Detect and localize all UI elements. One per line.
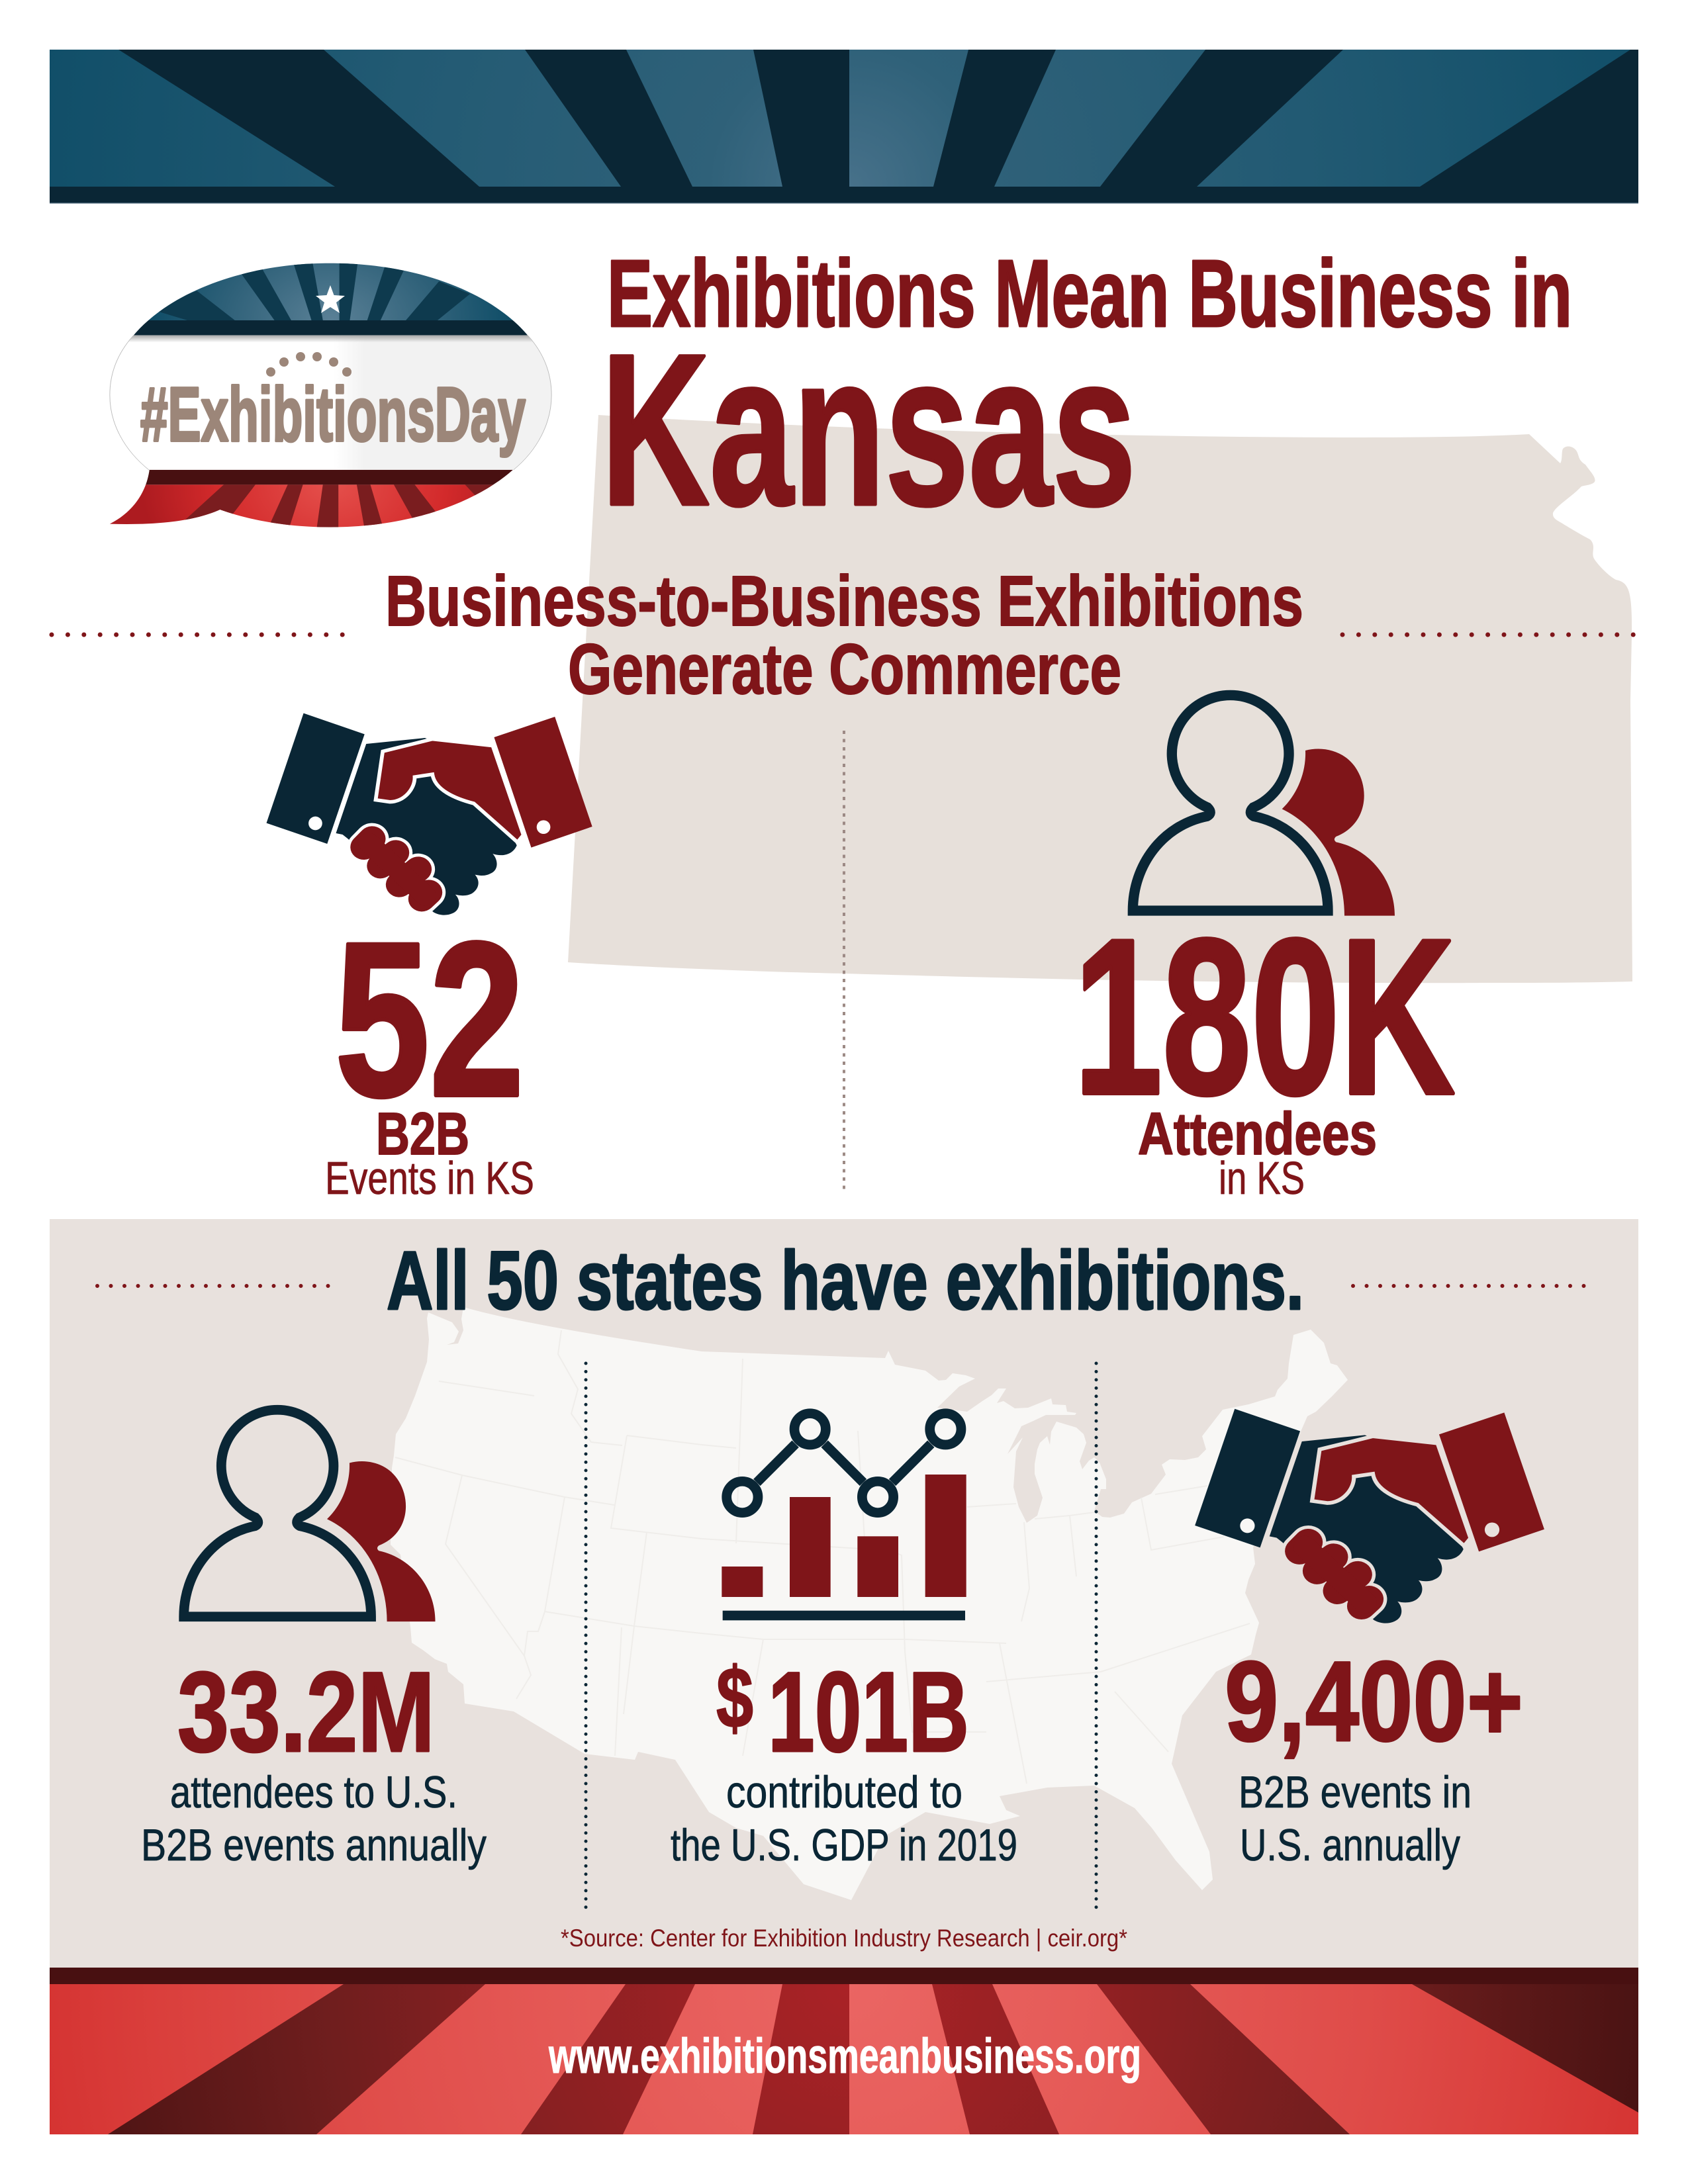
stat: 180K attendees: in KS xyxy=(1219,1152,1305,1204)
stat: $101B GDP: contributed to xyxy=(726,1767,962,1817)
stat: 52 B2B events: Events in KS xyxy=(325,1152,534,1204)
stat: 52 B2B events xyxy=(325,897,534,1204)
stat: 9,400+ events: U.S. annually xyxy=(1240,1820,1460,1870)
panel: all 50 states xyxy=(50,1219,1638,1968)
source note: *Source: Center for Exhibition Industry Research | ceir.org* xyxy=(561,1925,1127,1952)
title: Kansas: Kansas xyxy=(601,310,1136,551)
icon: handshake small xyxy=(1195,1409,1544,1623)
stat: 52 B2B events: 52 xyxy=(335,897,524,1142)
stat: 33.2M attendees xyxy=(141,1649,487,1870)
heading: business-to-business: Generate Commerce xyxy=(568,629,1121,709)
website url: www.exhibitionsmeanbusiness.org xyxy=(548,2028,1141,2083)
badge dots arc xyxy=(266,352,352,377)
stat: 180K attendees xyxy=(1074,893,1455,1204)
icon: people xyxy=(1133,695,1395,916)
US map xyxy=(391,1307,1348,1900)
stat: 52 B2B events: B2B xyxy=(376,1101,469,1167)
icon: chart xyxy=(722,1414,966,1620)
stat: 33.2M attendees: attendees to U.S. xyxy=(170,1767,457,1817)
stat: 9,400+ events: 9,400+ xyxy=(1225,1638,1523,1765)
badge star xyxy=(316,285,345,313)
stat: 180K attendees: Attendees xyxy=(1138,1101,1377,1167)
heading: business-to-business xyxy=(385,561,1303,709)
hashtag speech bubble badge xyxy=(109,263,552,527)
stat: $101B GDP: $ xyxy=(716,1649,753,1746)
stat: 9,400+ events xyxy=(1225,1638,1523,1870)
stat: 33.2M attendees: B2B events annually xyxy=(141,1820,487,1870)
kansas state silhouette xyxy=(568,415,1632,983)
heading: business-to-business: Business-to-Business Exhibitions xyxy=(385,561,1303,641)
icon: people small xyxy=(184,1410,436,1621)
badge hashtag text: #ExhibitionsDay xyxy=(140,371,526,457)
stat: 9,400+ events: B2B events in xyxy=(1239,1767,1472,1817)
stat: 33.2M attendees: 33.2M xyxy=(177,1649,435,1776)
bottom banner xyxy=(50,1968,1638,2134)
stat: 180K attendees: 180K xyxy=(1074,893,1455,1140)
stat: $101B GDP: 101B xyxy=(768,1649,969,1776)
stat: $101B GDP xyxy=(671,1649,1017,1870)
heading: all 50 states have exhibitions: All 50 states have exhibitions. xyxy=(387,1235,1304,1327)
top banner xyxy=(50,50,1638,204)
stat: $101B GDP: the U.S. GDP in 2019 xyxy=(671,1820,1017,1870)
icon: handshake xyxy=(266,713,592,915)
